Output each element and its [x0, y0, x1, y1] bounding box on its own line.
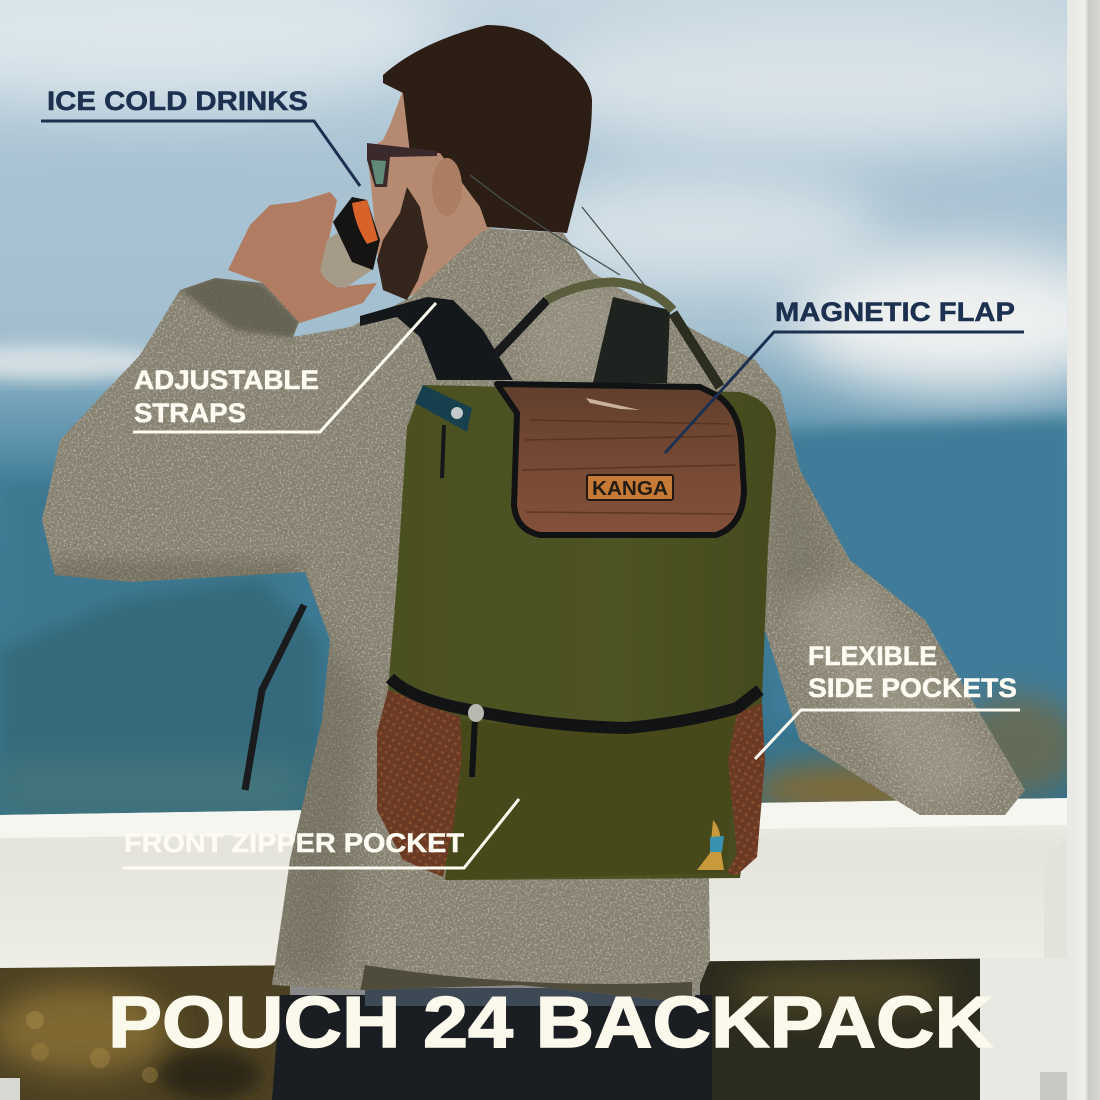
- shoulder strap right: [593, 297, 670, 383]
- strap from bag to handle: [493, 300, 547, 357]
- sweater shading: [270, 600, 370, 980]
- kangaroo logo: [697, 820, 724, 870]
- backpack: [377, 282, 776, 880]
- title: POUCH 24 BACKPACK: [108, 983, 993, 1063]
- background: bokeh foliage: [0, 955, 990, 1100]
- KANGA logo patch: KANGA: [592, 478, 668, 500]
- zip pull: [468, 704, 484, 777]
- ear: [432, 158, 462, 216]
- callout: front zipper pocket: [123, 799, 519, 868]
- right mesh pocket: [727, 703, 765, 875]
- callout: adjustable straps: STRAPS: [134, 398, 246, 428]
- wood grain: [522, 420, 736, 514]
- glasses cord: [470, 175, 650, 292]
- loose backpack strap: [245, 605, 376, 790]
- tumbler: [320, 197, 380, 288]
- shoulder strap left: [360, 297, 513, 380]
- top handle: [547, 282, 673, 310]
- callout: ice cold drinks: [41, 86, 360, 186]
- sweater: [30, 220, 1040, 1020]
- hair: [383, 25, 592, 233]
- face and neck: [367, 90, 490, 297]
- handle webbing: [673, 313, 720, 387]
- callout: magnetic flap: MAGNETIC FLAP: [775, 297, 1015, 327]
- callout: magnetic flap: [665, 297, 1024, 453]
- callout: flexible side pockets: FLEXIBLE: [808, 641, 937, 671]
- white porch post: [1067, 0, 1100, 1100]
- callout: adjustable straps: [133, 303, 436, 432]
- trousers: [272, 995, 712, 1100]
- beard: [377, 187, 428, 300]
- callout: ice cold drinks: ICE COLD DRINKS: [47, 86, 308, 116]
- left mesh pocket: [377, 690, 462, 877]
- flap highlight: [586, 398, 640, 410]
- hand: [228, 192, 377, 323]
- white railing: [0, 798, 1072, 1100]
- callout: flexible side pockets: SIDE POCKETS: [808, 673, 1017, 703]
- sunglasses: [367, 143, 437, 187]
- zipper: [390, 678, 760, 728]
- callout: front zipper pocket: FRONT ZIPPER POCKET: [124, 828, 465, 858]
- lower pocket: [445, 712, 737, 880]
- callout: adjustable straps: ADJUSTABLE: [134, 365, 319, 395]
- side zip tab: [415, 385, 472, 478]
- main olive body: [388, 385, 776, 880]
- callout: flexible side pockets: [755, 641, 1020, 759]
- background: sky and mountains: [0, 0, 1100, 830]
- leather flap: [497, 384, 744, 535]
